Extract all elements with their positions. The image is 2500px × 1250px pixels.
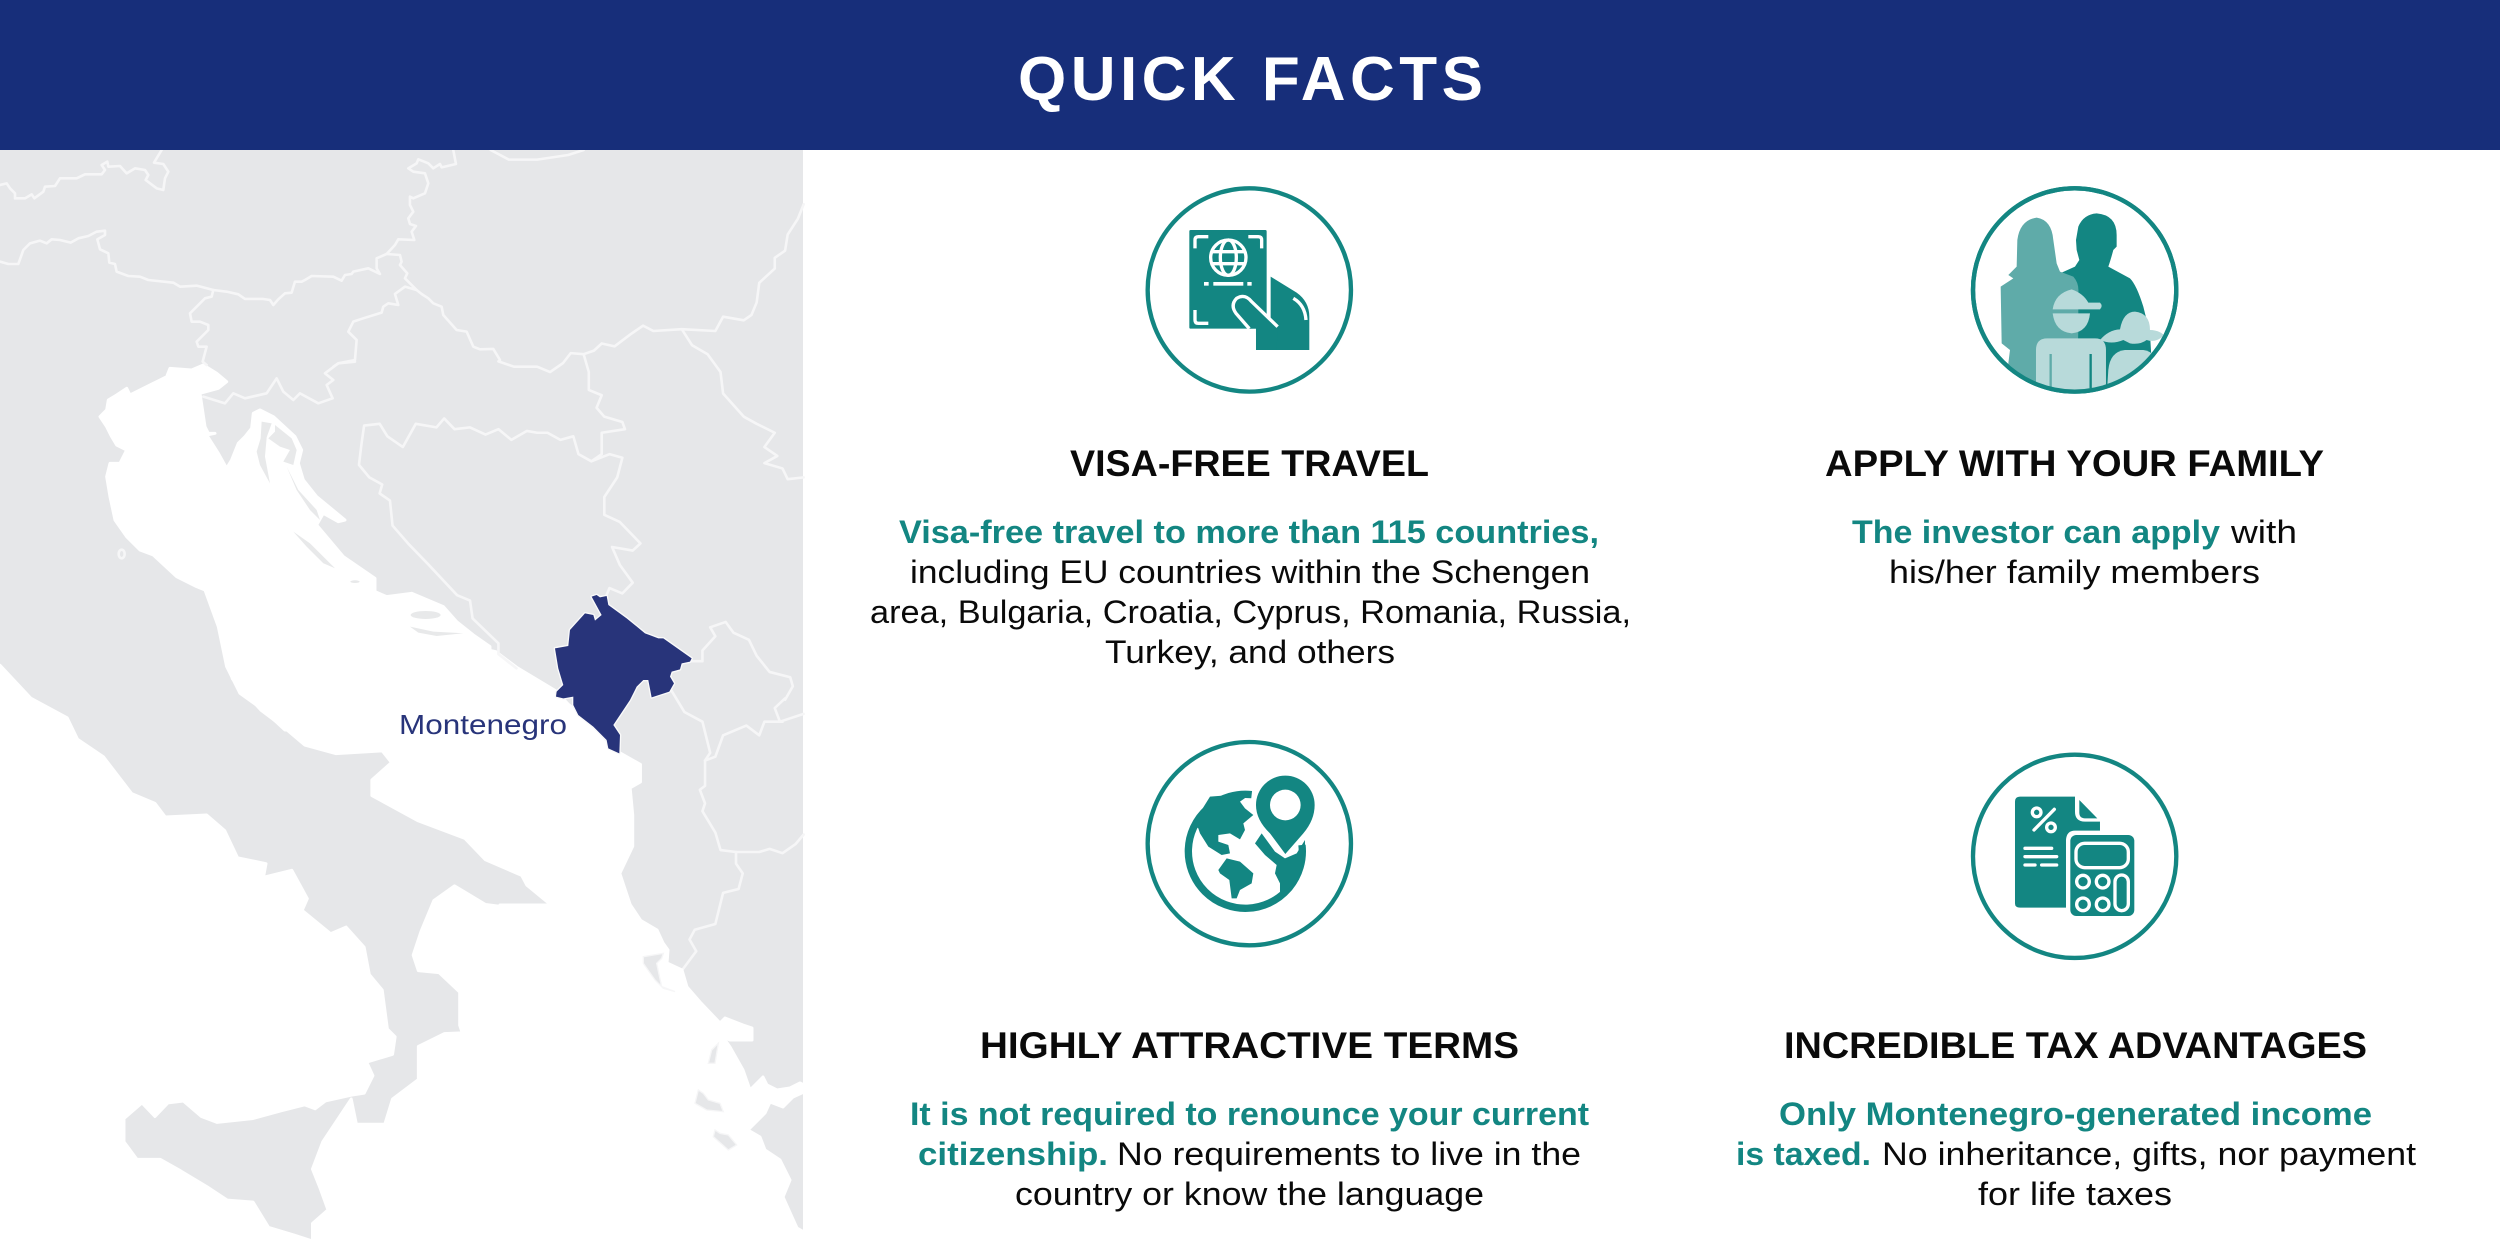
text block: for life taxes — [1978, 1176, 2172, 1212]
panel: map of the Adriatic region — [0, 150, 804, 1250]
text block: Only Montenegro-generated income — [1779, 1096, 2372, 1132]
text block: country or know the language — [1015, 1176, 1484, 1212]
text block — [910, 1096, 1589, 1212]
text block — [1852, 514, 2297, 590]
header banner: Quick Facts: QUICK FACTS — [1018, 45, 1483, 114]
text block: It is not required to renounce your current — [910, 1096, 1589, 1132]
icon: globe with location pin — [1148, 742, 1351, 945]
text block: The investor can apply — [1852, 514, 2220, 550]
text block — [1736, 1096, 2416, 1212]
icon: tax document and calculator — [1973, 755, 2176, 958]
text block: No inheritance, gifts, nor payment — [1882, 1136, 2416, 1172]
text block: No requirements to live in the — [1117, 1136, 1581, 1172]
icon: family silhouettes — [1973, 188, 2176, 397]
text block — [870, 514, 1631, 670]
panel: visa-free travel — [870, 188, 1631, 670]
icon: passport and hand — [1148, 188, 1351, 392]
header banner: Quick Facts — [0, 0, 2500, 150]
panel: highly attractive terms — [910, 742, 1589, 1212]
text block: Visa-free travel to more than 115 countries, — [899, 514, 1599, 550]
text block: with — [2230, 514, 2297, 550]
text block: citizenship. — [918, 1136, 1108, 1172]
map label: Montenegro: Montenegro — [399, 709, 567, 740]
text block: area, Bulgaria, Croatia, Cyprus, Romania, Russia, — [870, 594, 1631, 630]
panel: apply with your family — [1825, 188, 2324, 590]
text block: including EU countries within the Schengen — [910, 554, 1590, 590]
heading: APPLY WITH YOUR FAMILY — [1825, 443, 2324, 484]
heading: HIGHLY ATTRACTIVE TERMS — [980, 1025, 1519, 1066]
panel: incredible tax advantages — [1736, 755, 2416, 1212]
text block: Turkey, and others — [1105, 634, 1395, 670]
heading: VISA-FREE TRAVEL — [1070, 443, 1429, 484]
text block: his/her family members — [1889, 554, 2260, 590]
map highlight: Montenegro — [555, 595, 692, 753]
text block: is taxed. — [1736, 1136, 1871, 1172]
heading: INCREDIBLE TAX ADVANTAGES — [1784, 1025, 2367, 1066]
